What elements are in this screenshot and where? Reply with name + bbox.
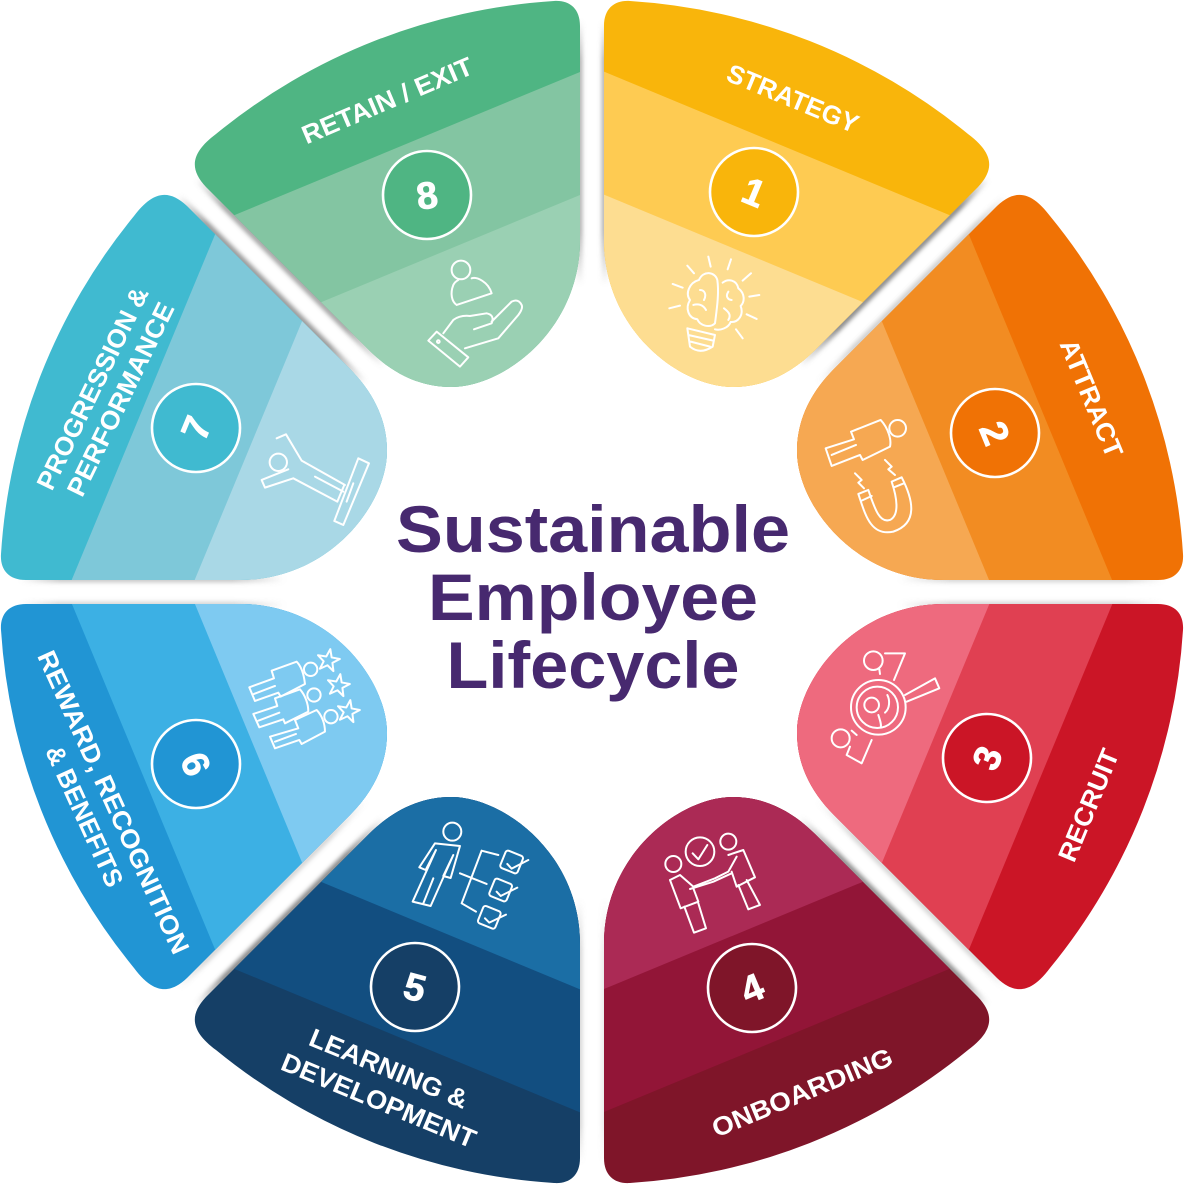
- number badge 1: [710, 148, 798, 236]
- label: retain / exit: RETAIN / EXIT: [297, 51, 477, 150]
- number badge 7: [152, 384, 240, 472]
- number badge 7: 7: [174, 411, 221, 446]
- icon: person with checklist: [413, 823, 528, 929]
- title: [396, 492, 790, 702]
- icon: hand holding person: [428, 261, 522, 367]
- label: learning and development: LEARNING &: [305, 1022, 473, 1115]
- icon: person with raised arms: [262, 434, 369, 525]
- number badge 5: 5: [399, 965, 430, 1011]
- title: Sustainable: [396, 492, 790, 566]
- label: onboarding: ONBOARDING: [707, 1042, 897, 1143]
- number badge 6: [152, 720, 240, 808]
- number badge 3: 3: [965, 741, 1012, 776]
- label: reward, recognition and benefits: REWARD, RECOGNITION: [31, 646, 196, 959]
- label: progression and performance: PROGRESSION &: [30, 282, 155, 495]
- label: reward, recognition and benefits: & BENEFITS: [39, 741, 130, 892]
- number badge 2: [951, 389, 1039, 477]
- icon: handshake with checkmark: [665, 834, 760, 933]
- number badge 6: 6: [171, 747, 218, 782]
- number badge 2: 2: [970, 416, 1017, 451]
- panel: segment 2 attract: [797, 194, 1184, 580]
- label: progression and performance: PERFORMANCE: [61, 297, 180, 501]
- segment 7 colour bands: [0, 184, 392, 584]
- panel: segment 8 retain / exit: [194, 0, 580, 387]
- segment 3 colour bands: [792, 600, 1184, 1000]
- panel: segment 6 reward, recognition and benefits: [0, 604, 387, 990]
- title: Lifecycle: [446, 628, 740, 702]
- number badge 4: 4: [735, 966, 770, 1013]
- title: Employee: [428, 560, 758, 634]
- icon: magnifier over candidates: [832, 651, 939, 763]
- number badge 8: 8: [414, 174, 441, 219]
- panel: segment 3 recruit: [792, 600, 1184, 1000]
- number badge 8: [383, 151, 471, 239]
- label: learning and development: DEVELOPMENT: [277, 1047, 481, 1154]
- number badge 1: 1: [736, 170, 771, 217]
- label: recruit: RECRUIT: [1052, 744, 1125, 866]
- segment 8 colour bands: [194, 0, 580, 387]
- panel: segment 5 learning and development: [184, 792, 584, 1184]
- segment 5 colour bands: [184, 792, 584, 1184]
- panel: segment 1 strategy: [600, 0, 1000, 392]
- label: strategy: STRATEGY: [722, 58, 863, 139]
- segment 2 colour bands: [797, 194, 1184, 580]
- number badge 5: [371, 943, 459, 1031]
- panel: segment 7 progression and performance: [0, 184, 392, 584]
- label: attract: ATTRACT: [1054, 335, 1129, 462]
- icon: team members with stars: [249, 647, 361, 748]
- icon: magnet attracting person: [826, 420, 911, 532]
- number badge 4: [708, 944, 796, 1032]
- panel: segment 4 onboarding: [604, 797, 990, 1184]
- segment 1 colour bands: [600, 0, 1000, 392]
- number badge 3: [943, 714, 1031, 802]
- icon: brain light bulb: [669, 257, 759, 351]
- segment 6 colour bands: [0, 604, 387, 990]
- segment 4 colour bands: [604, 797, 990, 1184]
